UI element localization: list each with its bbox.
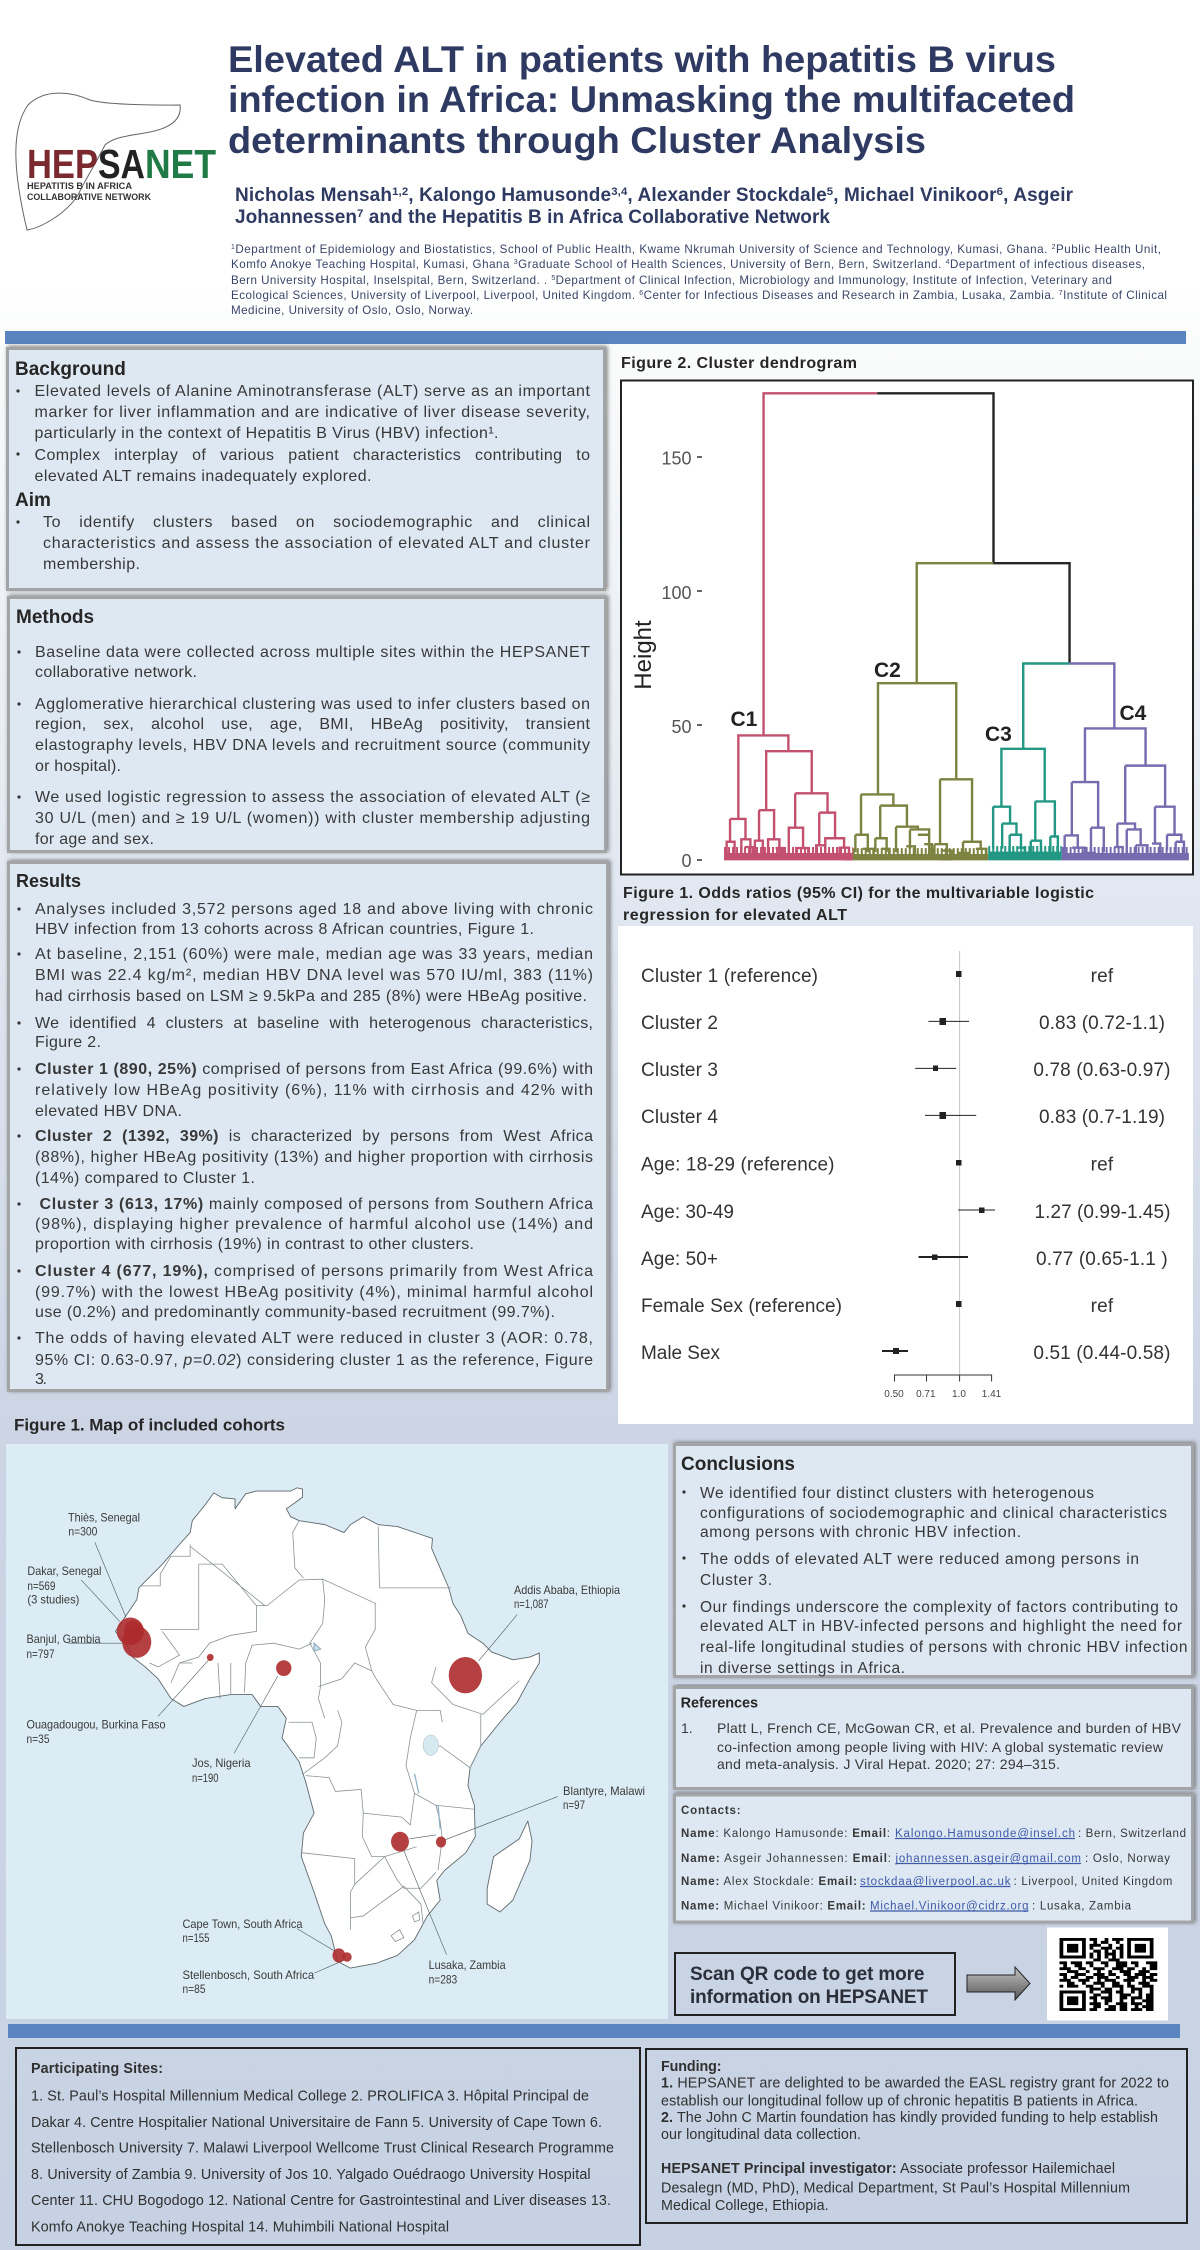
affiliations: 1 — [231, 244, 235, 251]
reference entry — [681, 1720, 1182, 1772]
background bullets: marker for liver inflammation and are indicative of liver disease severity, — [34, 404, 590, 421]
x axis — [884, 1375, 1002, 1400]
principal investigator text: HEPSANET Principal investigator: Associate professor Hailemichael — [661, 2161, 1115, 2177]
chart: forest plot — [618, 926, 1193, 1424]
result values: ref — [1091, 1154, 1114, 1176]
principal investigator text: Medical College, Ethiopia. — [661, 2198, 829, 2214]
conclusions bullets: elevated ALT in HBV-infected persons and highlight the need for — [700, 1618, 1182, 1635]
contact lines — [681, 1828, 1186, 1912]
results bullets: 95% CI: 0.63-0.97, p=0.02) considering cluster 1 as the reference, Figure — [35, 1352, 593, 1369]
reference entry: and meta-analysis. J Viral Hepat. 2020; 27: 294–315. — [717, 1756, 1060, 1772]
result values — [1033, 966, 1170, 1364]
result values: ref — [1091, 966, 1114, 987]
reference entry: 1. — [681, 1720, 693, 1736]
results bullets: (14%) compared to Cluster 1. — [35, 1170, 255, 1187]
heading: figure 2: Figure 2. Cluster dendrogram — [621, 355, 857, 372]
map labels: Addis Ababa, Ethiopia — [514, 1583, 620, 1597]
affiliations: 6 — [639, 290, 643, 297]
authors: Johannessen — [235, 207, 357, 228]
map labels: n=283 — [429, 1972, 457, 1986]
conclusions bullets: configurations of sociodemographic and clinical characteristics — [700, 1505, 1167, 1522]
cluster labels: C2 — [874, 659, 901, 682]
heading: map figure: Figure 1. Map of included cohorts — [14, 1416, 285, 1434]
heading: results: Results — [16, 871, 81, 891]
results bullets: Cluster 3 (613, 17%) mainly composed of persons from Southern Africa — [40, 1196, 593, 1213]
reference entry: co-infection among people living with HIV: A global systematic review — [717, 1739, 1164, 1755]
results bullets: (98%), displaying higher prevalence of harmful alcohol use (14%) and — [35, 1216, 593, 1233]
affiliations: 5 — [551, 275, 555, 282]
conclusions bullets — [682, 1485, 1188, 1677]
logo: HEPSANET: SA — [98, 141, 145, 187]
authors: , Michael Vinikoor — [833, 185, 997, 206]
title — [228, 39, 1075, 161]
results bullets: We identified 4 clusters at baseline with heterogenous characteristics, — [35, 1015, 593, 1032]
map labels: n=1,087 — [514, 1597, 549, 1611]
row labels: Cluster 3 — [641, 1060, 718, 1081]
map labels: Lusaka, Zambia — [429, 1958, 506, 1972]
funding text — [661, 2059, 1169, 2143]
chart: cluster dendrogram — [621, 380, 1193, 874]
map labels: Blantyre, Malawi — [563, 1784, 645, 1798]
affiliations: 2 — [1052, 244, 1056, 251]
row labels — [641, 966, 842, 1364]
contact lines: Name: Michael Vinikoor: Email: — [681, 1900, 866, 1912]
logo: HEPSANET — [16, 93, 216, 230]
dendrogram branches — [724, 393, 1189, 860]
heading: odds ratios figure: regression for elevated ALT — [623, 907, 847, 924]
methods bullets: region, sex, alcohol use, age, BMI, HBeAg positivity, transient — [35, 716, 591, 733]
reference line — [959, 951, 961, 1375]
map labels: Cape Town, South Africa — [182, 1917, 303, 1931]
affiliations: Medicine, University of Oslo, Oslo, Norway. — [231, 304, 473, 317]
map panel — [6, 1444, 668, 2019]
results bullets: relatively low HBeAg positivity (6%), 11% with cirrhosis and 42% with — [35, 1082, 593, 1099]
row labels: Cluster 2 — [641, 1013, 718, 1034]
affiliations: 4 — [946, 259, 950, 266]
contact lines: johannessen.asgeir@gmail.com — [894, 1853, 1081, 1865]
results bullets: Analyses included 3,572 persons aged 18 and above living with chronic — [35, 901, 593, 918]
results bullets: (88%), higher HBeAg positivity (13%) and higher proportion with cirrhosis — [35, 1149, 593, 1166]
authors: , Kalongo Hamusonde — [408, 185, 611, 206]
result values: ref — [1091, 1296, 1114, 1317]
affiliations: 7 — [1059, 290, 1063, 297]
results bullets: Figure 2. — [35, 1034, 101, 1051]
authors: , Alexander Stockdale — [627, 185, 827, 206]
conclusions bullets: among persons with chronic HBV infection. — [700, 1524, 1021, 1541]
x axis: 1.0 — [952, 1389, 966, 1400]
contact lines: Michael.Vinikoor@cidrz.org — [870, 1900, 1028, 1912]
top divider bar — [5, 331, 1186, 344]
contact lines: : Bern, Switzerland — [1078, 1828, 1186, 1840]
site list: Center 11. CHU Bogodogo 12. National Centre for Gastrointestinal and Liver diseases 13. — [31, 2193, 611, 2209]
row labels: Age: 18-29 (reference) — [641, 1154, 834, 1176]
row labels: Cluster 4 — [641, 1107, 718, 1128]
results bullets: Cluster 4 (677, 19%), comprised of persons primarily from West Africa — [35, 1263, 593, 1280]
methods bullets — [17, 644, 591, 848]
panel: participating sites — [16, 2048, 640, 2245]
funding text: 1. HEPSANET are delighted to be awarded the EASL registry grant for 2022 to — [661, 2076, 1169, 2092]
result values: 1.27 (0.99-1.45) — [1034, 1202, 1170, 1223]
row labels: Male Sex — [641, 1343, 720, 1364]
authors: 5 — [827, 186, 834, 198]
cluster labels — [730, 659, 1147, 746]
results bullets: HBV infection from 13 cohorts across 8 African countries, Figure 1. — [35, 921, 534, 938]
result values: 0.83 (0.7-1.19) — [1039, 1107, 1165, 1128]
heading: participating sites: Participating Sites: — [31, 2061, 163, 2077]
heading: background: Background — [15, 359, 126, 380]
map labels: n=300 — [68, 1525, 98, 1539]
site list: Stellenbosch University 7. Malawi Liverpool Wellcome Trust Clinical Research Programme — [31, 2141, 614, 2157]
map labels: Thiès, Senegal — [68, 1510, 140, 1524]
heading: odds ratios figure: Figure 1. Odds ratios (95% CI) for the multivariable logistic — [623, 885, 1094, 902]
logo: HEPSANET: COLLABORATIVE NETWORK — [27, 192, 151, 203]
cluster labels: C1 — [730, 708, 758, 731]
cohort bubbles — [117, 1618, 482, 1963]
bottom divider bar — [8, 2024, 1180, 2038]
title: Elevated ALT in patients with hepatitis B virus — [228, 39, 1056, 80]
funding text: Funding: — [661, 2059, 722, 2075]
panel: funding — [646, 2049, 1187, 2223]
principal investigator text — [661, 2161, 1130, 2214]
affiliations: Institute of Clinical — [1063, 289, 1167, 302]
x axis: 0.71 — [916, 1389, 936, 1400]
methods bullets: elastography levels, HBV DNA levels and recruitment source (community — [35, 737, 590, 754]
results bullets: BMI was 22.4 kg/m², median HBV DNA level was 570 IU/ml, 383 (11%) — [35, 967, 593, 984]
results bullets: use (0.2%) and predominantly community-based recruitment (99.7%). — [35, 1304, 555, 1321]
aim bullet — [16, 514, 591, 573]
map labels: n=797 — [26, 1647, 55, 1661]
map labels: Dakar, Senegal — [27, 1564, 101, 1578]
y axis: 50 — [671, 717, 692, 737]
callout: scan QR code: information on HEPSANET — [690, 1987, 928, 2008]
heading: aim: Aim — [15, 490, 51, 511]
results bullets: Cluster 2 (1392, 39%) is characterized by persons from West Africa — [35, 1128, 593, 1145]
affiliations: Department of infectious diseases, — [950, 258, 1145, 271]
aim bullet: To identify clusters based on sociodemographic and clinical — [43, 514, 590, 531]
site list — [31, 2089, 614, 2236]
affiliations: Department of Clinical Infection, Microbiology and Immunology, Institute of Infection, Veterinary and — [556, 274, 1112, 287]
affiliations: 3 — [514, 259, 518, 266]
cluster labels: C3 — [985, 723, 1012, 746]
map labels: Jos, Nigeria — [192, 1756, 251, 1770]
contact lines: : Liverpool, United Kingdom — [1014, 1876, 1172, 1888]
conclusions bullets: Cluster 3. — [700, 1572, 772, 1589]
results bullets: elevated HBV DNA. — [35, 1103, 182, 1120]
map labels: n=569 — [27, 1579, 56, 1593]
panel: methods — [8, 598, 606, 852]
results bullets: The odds of having elevated ALT were reduced in cluster 3 (AOR: 0.78, — [35, 1330, 593, 1347]
aim bullet: membership. — [43, 556, 140, 573]
results bullets: Cluster 1 (890, 25%) comprised of persons from East Africa (99.6%) with — [35, 1061, 593, 1078]
authors: 7 — [357, 208, 363, 220]
panel: contacts — [674, 1795, 1192, 1922]
heading: odds ratios figure — [623, 885, 1094, 924]
funding text: 2. The John C Martin foundation has kindly provided funding to help establish — [661, 2110, 1158, 2126]
map labels — [26, 1510, 645, 1996]
methods bullets: Baseline data were collected across multiple sites within the HEPSANET — [35, 644, 590, 661]
heading: contacts: Contacts: — [681, 1805, 741, 1817]
logo: HEPSANET: NET — [145, 141, 216, 187]
leader lines — [68, 1542, 558, 1973]
map labels: Banjul, Gambia — [26, 1632, 101, 1646]
aim bullet: characteristics and assess the association of elevated ALT and cluster — [43, 535, 591, 552]
cluster labels: C4 — [1120, 702, 1147, 725]
funding text: establish our longitudinal follow up of chronic hepatitis B patients in Africa. — [661, 2094, 1138, 2110]
logo: HEPSANET: HEPATITIS B IN AFRICA — [27, 181, 132, 192]
contact lines: Kalongo.Hamusonde@insel.ch — [895, 1828, 1075, 1840]
methods bullets: We used logistic regression to assess the association of elevated ALT (≥ — [35, 789, 590, 806]
affiliations: Graduate School of Health Sciences, University of Bern, Bern, Switzerland. — [518, 258, 945, 271]
results bullets: At baseline, 2,151 (60%) were male, median age was 33 years, median — [35, 946, 593, 963]
result values: 0.51 (0.44-0.58) — [1033, 1343, 1170, 1364]
methods bullets: collaborative network. — [35, 664, 197, 681]
affiliations: Center for Infectious Diseases and Research in Zambia, Lusaka, Zambia. — [644, 289, 1058, 302]
row labels: Cluster 1 (reference) — [641, 966, 818, 987]
authors: Nicholas Mensah — [235, 185, 392, 206]
icon: QR code — [1047, 1928, 1168, 2020]
authors: , Asgeir — [1003, 185, 1074, 206]
map: Africa — [68, 1488, 558, 1973]
logo: HEPSANET: HEP — [27, 141, 98, 187]
affiliations — [231, 243, 1167, 317]
conclusions bullets: The odds of elevated ALT were reduced among persons in — [700, 1551, 1139, 1568]
map labels: n=35 — [26, 1732, 50, 1746]
results bullets: proportion with cirrhosis (19%) in contrast to other clusters. — [35, 1236, 474, 1253]
authors: 6 — [997, 186, 1003, 198]
x axis: 0.50 — [884, 1389, 904, 1400]
results bullets — [17, 901, 593, 1388]
background bullets — [16, 383, 591, 485]
result values: 0.78 (0.63-0.97) — [1033, 1060, 1170, 1081]
authors: and the Hepatitis B in Africa Collaborative Network — [363, 207, 830, 228]
background bullets: Elevated levels of Alanine Aminotransferase (ALT) serve as an important — [34, 383, 591, 400]
map labels: n=97 — [563, 1798, 585, 1812]
y axis: 0 — [681, 851, 692, 871]
heading: references: References — [681, 1696, 758, 1712]
panel: results — [8, 862, 608, 1390]
methods bullets: Agglomerative hierarchical clustering was used to infer clusters based on — [35, 696, 590, 713]
contact lines: : Lusaka, Zambia — [1032, 1900, 1132, 1912]
affiliations: Department of Epidemiology and Biostatistics, School of Public Health, Kwame Nkrumah University of Science and Technology, Kumasi, Ghana. — [235, 243, 1051, 256]
background bullets: Complex interplay of various patient characteristics contributing to — [34, 447, 590, 464]
conclusions bullets: in diverse settings in Africa. — [700, 1660, 905, 1677]
result values: 0.83 (0.72-1.1) — [1039, 1013, 1165, 1034]
site list: Dakar 4. Centre Hospitalier National Universitaire de Fann 5. University of Cape Town 6. — [31, 2115, 602, 2131]
row labels: Age: 30-49 — [641, 1202, 734, 1223]
conclusions bullets: Our findings underscore the complexity of factors contributing to — [700, 1599, 1178, 1616]
title: determinants through Cluster Analysis — [228, 120, 926, 161]
methods bullets: 30 U/L (men) and ≥ 19 U/L (women)) with cluster membership adjusting — [35, 810, 590, 827]
authors: 1,2 — [392, 186, 408, 198]
site list: Komfo Anokye Teaching Hospital 14. Muhimbili National Hospital — [31, 2220, 449, 2236]
affiliations: Ecological Sciences, University of Liverpool, Liverpool, United Kingdom. — [231, 289, 635, 302]
principal investigator text: Desalegn (MD, PhD), Medical Department, St Paul’s Hospital Millennium — [661, 2181, 1130, 2197]
panel: references — [674, 1688, 1192, 1788]
authors — [235, 185, 1074, 228]
y axis — [630, 448, 702, 871]
map labels: Stellenbosch, South Africa — [182, 1968, 314, 1982]
contact lines: Name: Alex Stockdale: Email: — [681, 1876, 857, 1888]
background bullets: particularly in the context of Hepatitis B Virus (HBV) infection¹. — [34, 425, 498, 442]
conclusions bullets: We identified four distinct clusters with heterogenous — [700, 1485, 1094, 1502]
row labels: Female Sex (reference) — [641, 1296, 842, 1317]
results bullets: (99.7%) with the lowest HBeAg positivity (4%), minimal harmful alcohol — [35, 1284, 593, 1301]
callout: scan QR code — [675, 1953, 955, 2015]
y axis: 100 — [661, 583, 692, 603]
methods bullets: for age and sex. — [35, 831, 154, 848]
x axis: 1.41 — [982, 1389, 1002, 1400]
reference entry: Platt L, French CE, McGowan CR, et al. Prevalence and burden of HBV — [717, 1720, 1182, 1736]
affiliations: Public Health Unit, — [1056, 243, 1161, 256]
title: infection in Africa: Unmasking the multifaceted — [228, 79, 1075, 120]
callout: scan QR code: Scan QR code to get more — [690, 1964, 924, 1985]
authors: 3,4 — [611, 186, 628, 198]
methods bullets: or hospital). — [35, 758, 121, 775]
contact lines: Name: Kalongo Hamusonde: Email: — [681, 1828, 890, 1840]
heading: conclusions: Conclusions — [681, 1454, 795, 1475]
site list: 1. St. Paul’s Hospital Millennium Medical College 2. PROLIFICA 3. Hôpital Principal de — [31, 2089, 589, 2105]
affiliations: Komfo Anokye Teaching Hospital, Kumasi, Ghana — [231, 258, 509, 271]
results bullets: 3. — [35, 1371, 47, 1388]
map labels: n=85 — [182, 1982, 206, 1996]
site list: 8. University of Zambia 9. University of Jos 10. Yalgado Ouédraogo University Hospital — [31, 2167, 591, 2183]
background bullets: elevated ALT remains inadequately explored. — [34, 468, 372, 485]
map labels: n=155 — [182, 1931, 210, 1945]
y axis: Height — [630, 620, 657, 690]
contact lines: stockdaa@liverpool.ac.uk — [860, 1876, 1011, 1888]
affiliations: Bern University Hospital, Inselspital, Bern, Switzerland. . — [231, 274, 547, 287]
confidence intervals — [882, 971, 995, 1354]
y axis: 150 — [661, 448, 692, 468]
conclusions bullets: real-life longitudinal studies of persons with chronic HBV infection — [700, 1639, 1188, 1656]
panel: background and aim — [8, 348, 604, 590]
contact lines: Name: Asgeir Johannessen: Email: — [681, 1853, 891, 1865]
row labels: Age: 50+ — [641, 1249, 718, 1270]
results bullets: had cirrhosis based on LSM ≥ 9.5kPa and 285 (8%) were HBeAg positive. — [35, 988, 587, 1005]
contact lines: : Oslo, Norway — [1085, 1853, 1170, 1865]
map labels: Ouagadougou, Burkina Faso — [26, 1718, 166, 1732]
panel: conclusions — [674, 1444, 1192, 1677]
map labels: (3 studies) — [27, 1593, 79, 1607]
arrow to QR code — [967, 1967, 1030, 2000]
map labels: n=190 — [192, 1771, 219, 1785]
result values: 0.77 (0.65-1.1 ) — [1036, 1249, 1168, 1270]
heading: methods: Methods — [16, 607, 94, 628]
funding text: our longitudinal data collection. — [661, 2127, 861, 2143]
